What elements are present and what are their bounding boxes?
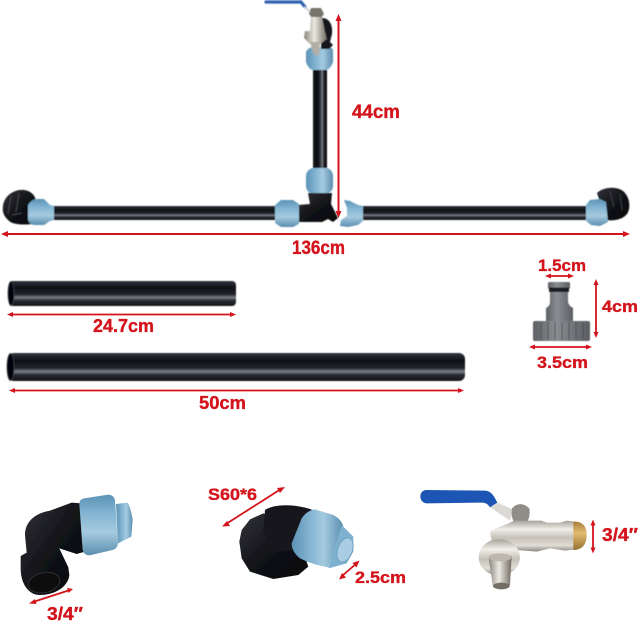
- black tee fitting: [298, 193, 338, 222]
- 50cm label: 50cm: [199, 393, 246, 413]
- 136cm width arrow: [1, 231, 630, 237]
- collar stub: [116, 503, 133, 543]
- 1.5cm label: 1.5cm: [538, 256, 586, 275]
- 1.5cm arrow: [545, 274, 574, 278]
- valve body: [490, 521, 575, 552]
- 44cm height arrow: [336, 14, 342, 218]
- hose tap connector: [533, 282, 590, 341]
- 2.5cm arrow: [339, 560, 360, 580]
- black elbow: [263, 505, 313, 552]
- elbow 3/4 label: 3/4″: [47, 604, 83, 624]
- left collar: [28, 199, 54, 225]
- S60 arrow: [222, 487, 285, 526]
- threaded outlet opening: [26, 570, 62, 596]
- collar stub: [328, 525, 353, 568]
- 50cm arrow: [9, 388, 464, 393]
- valve barb: [310, 42, 320, 55]
- elbow 3/4 arrow: [29, 588, 73, 604]
- valve stem: [512, 504, 530, 523]
- compression collar: [79, 495, 118, 555]
- S60 tank adapter: [239, 505, 356, 579]
- elbow fitting: [21, 495, 133, 596]
- right horizontal pipe: [360, 206, 588, 220]
- S60*6 label: S60*6: [208, 485, 257, 504]
- long pipe: [7, 353, 465, 381]
- spout ring: [479, 539, 520, 576]
- 24.7cm arrow: [7, 312, 236, 317]
- outlet opening: [334, 536, 356, 564]
- 4cm label: 4cm: [602, 297, 638, 316]
- valve 3/4 label: 3/4″: [602, 525, 638, 545]
- vertical pipe: [313, 68, 327, 170]
- silver lever end: [304, 7, 312, 13]
- 44cm label: 44cm: [352, 102, 400, 123]
- 2.5cm label: 2.5cm: [355, 568, 406, 587]
- 24.7cm label: 24.7cm: [93, 316, 154, 336]
- hose barb: [489, 556, 512, 589]
- 4cm arrow: [594, 279, 598, 338]
- 136cm label: 136cm: [292, 238, 345, 259]
- blue lever handle: [420, 490, 497, 507]
- left horizontal pipe: [48, 206, 276, 220]
- short pipe: [8, 281, 236, 306]
- black cap: [239, 513, 308, 579]
- hose valve black backing: [321, 18, 333, 49]
- valve 3/4 arrow: [590, 520, 596, 554]
- valve stem top: [309, 8, 324, 18]
- blue valve handle: [266, 2, 305, 7]
- silver lever neck: [490, 503, 514, 521]
- black elbow body: [21, 503, 85, 595]
- right collar: [586, 199, 608, 226]
- left tank cap: [3, 190, 36, 225]
- top collar: [306, 47, 333, 70]
- right tank cap: [597, 188, 629, 220]
- tee top collar: [306, 168, 333, 193]
- valve body: [304, 17, 327, 44]
- assembled T pipe system: [3, 2, 629, 227]
- brass thread: [573, 522, 587, 550]
- tee right collar: [340, 200, 363, 227]
- blue collar: [292, 509, 343, 567]
- tee left collar: [275, 200, 299, 227]
- left cap highlight: [8, 193, 22, 215]
- 3.5cm arrow: [529, 344, 592, 350]
- right cap highlight: [610, 191, 622, 210]
- bib tap valve: [420, 490, 587, 589]
- 3.5cm label: 3.5cm: [537, 353, 588, 372]
